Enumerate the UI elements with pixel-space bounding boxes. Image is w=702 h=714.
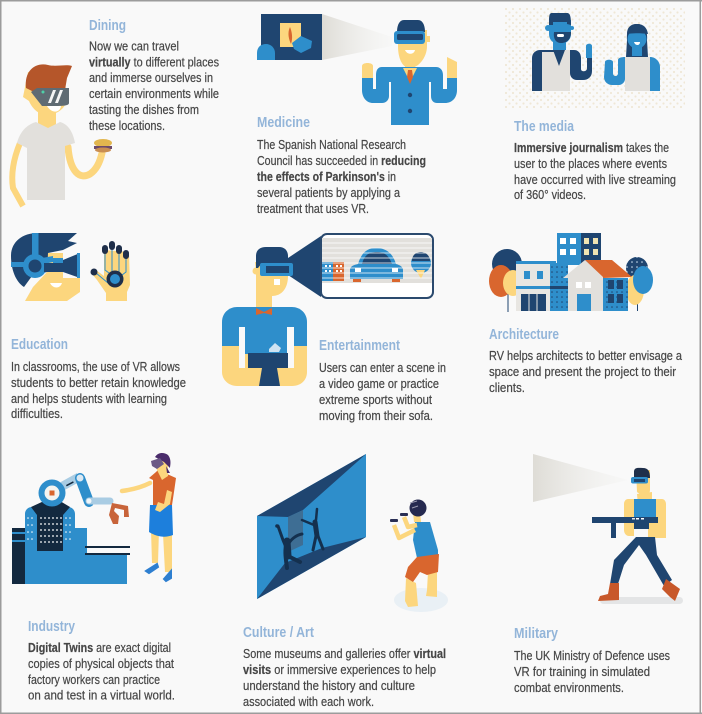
- text block: entertainment: a video game or practice: [319, 377, 439, 391]
- panel: culture and art: [243, 454, 448, 709]
- text block: medicine: The Spanish National Research: [257, 138, 406, 152]
- text block: education: In classrooms, the use of VR allows: [11, 360, 180, 374]
- text block: medicine: Council has succeeded in reducing: [257, 154, 426, 168]
- text block: education: and helps students with learning: [11, 392, 167, 406]
- panel: industry: [12, 453, 176, 702]
- text block: dining: virtually to different places: [89, 56, 219, 70]
- text block: medicine: treatment that uses VR.: [257, 202, 369, 216]
- panel: dining: [12, 18, 219, 206]
- text block: medicine: [257, 138, 426, 216]
- text block: industry: factory workers can practice: [28, 673, 160, 687]
- text block: entertainment: moving from their sofa.: [319, 409, 433, 423]
- panel: the media: [505, 8, 685, 202]
- heading: Military: Military: [514, 626, 558, 642]
- panel: military: [514, 454, 683, 695]
- panel: architecture: [489, 233, 682, 395]
- text block: dining: and immerse ourselves in: [89, 71, 213, 85]
- text block: the media: [514, 141, 676, 202]
- illustration: gamer with headset and projected car scene: [222, 234, 433, 386]
- heading: Medicine: Medicine: [257, 115, 310, 131]
- illustration: doctor with headset and projected screen: [257, 14, 457, 125]
- illustration: student head with headset and sensor glove: [11, 233, 130, 301]
- illustration: robot arm and woman with headset: [12, 453, 176, 584]
- text block: entertainment: Users can enter a scene in: [319, 361, 446, 375]
- text block: dining: certain environments while: [89, 87, 219, 101]
- text block: architecture: [489, 349, 682, 395]
- illustration: two journalists on dotted background: [505, 8, 685, 108]
- heading: Culture / Art: Culture / Art: [243, 625, 314, 641]
- text block: culture and art: [243, 647, 446, 709]
- text block: dining: tasting the dishes from: [89, 103, 199, 117]
- text block: military: The UK Ministry of Defence uses: [514, 649, 670, 663]
- panel: medicine: [257, 14, 457, 216]
- text block: the media: user to the places where events: [514, 157, 667, 171]
- text block: medicine: the effects of Parkinson's in: [257, 170, 396, 184]
- text block: industry: [28, 641, 175, 702]
- text block: the media: have occurred with live streaming: [514, 173, 676, 187]
- illustration: man with headset eating burger: [12, 64, 112, 206]
- text block: architecture: clients.: [489, 381, 525, 395]
- text block: architecture: space and present the project to their: [489, 365, 676, 379]
- heading: Architecture: Architecture: [489, 327, 559, 343]
- text block: education: students to better retain knowledge: [11, 376, 186, 390]
- text block: industry: on and test in a virtual world.: [28, 688, 175, 702]
- text block: medicine: several patients by applying a: [257, 186, 400, 200]
- text block: entertainment: extreme sports without: [319, 393, 432, 407]
- illustration: soldier with headset and rifle: [533, 454, 683, 604]
- text block: entertainment: [319, 361, 446, 423]
- heading: Entertainment: Entertainment: [319, 338, 400, 354]
- heading: The media: The media: [514, 119, 575, 135]
- text block: culture and art: visits or immersive experiences to help: [243, 663, 436, 677]
- heading: Dining: Dining: [89, 18, 126, 34]
- text block: the media: Immersive journalism takes the: [514, 141, 669, 155]
- text block: industry: Digital Twins are exact digital: [28, 641, 171, 655]
- panel: entertainment: [222, 234, 446, 423]
- text block: the media: of 360° videos.: [514, 188, 586, 202]
- text block: military: [514, 649, 670, 695]
- heading: Industry: Industry: [28, 619, 75, 635]
- illustration: buildings and trees: [489, 233, 653, 312]
- text block: military: combat environments.: [514, 681, 624, 695]
- text block: education: [11, 360, 186, 421]
- text block: culture and art: associated with each work.: [243, 695, 374, 709]
- heading: Education: Education: [11, 337, 68, 353]
- panel: education: [11, 233, 186, 421]
- illustration: virtual gallery wall and visitor: [257, 454, 448, 612]
- text block: culture and art: Some museums and galleries offer virtual: [243, 647, 446, 661]
- text block: dining: [89, 40, 219, 133]
- text block: military: VR for training in simulated: [514, 665, 650, 679]
- text block: dining: Now we can travel: [89, 40, 179, 54]
- text block: dining: these locations.: [89, 119, 165, 133]
- text block: education: difficulties.: [11, 407, 63, 421]
- text block: industry: copies of physical objects that: [28, 657, 174, 671]
- text block: culture and art: understand the history and culture: [243, 679, 415, 693]
